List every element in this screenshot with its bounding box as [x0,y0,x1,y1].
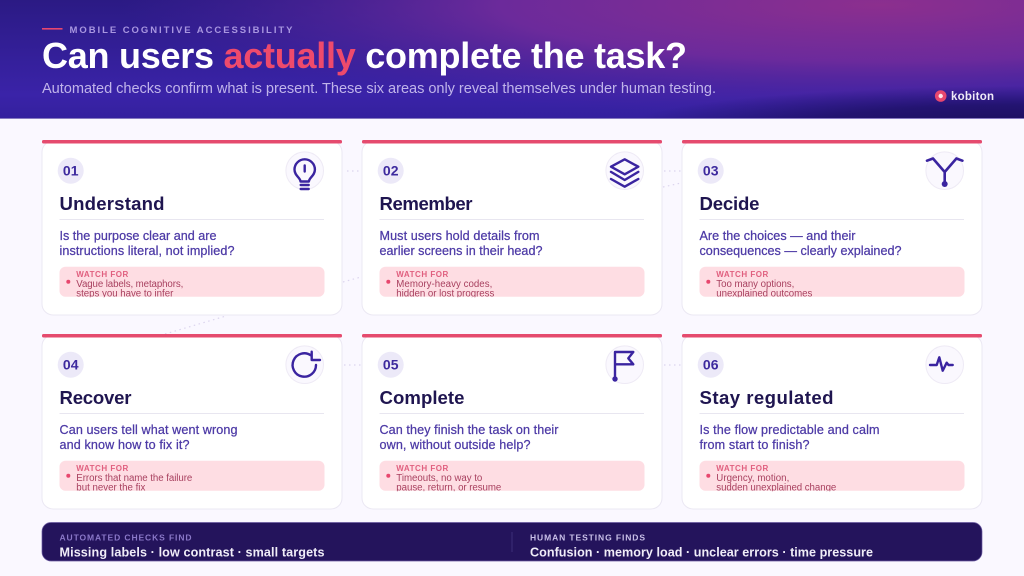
logo: kobiton: kobiton [951,91,994,103]
number badge 02 [378,158,404,184]
number badge 03: 03 [703,163,719,179]
watch for callout: pause, return, or resume [396,482,501,493]
panel: 02 Remember [362,140,662,315]
icon: layers [606,152,644,190]
number badge 01: 01 [63,163,79,179]
question: Are the choices — and their [700,229,856,243]
question: Is the purpose clear and are [60,229,216,243]
question: and know how to fix it? [60,438,190,452]
watch for callout [60,267,324,299]
header band [0,0,1024,119]
watch for callout: WATCH FOR [716,464,769,473]
watch for callout: Vague labels, metaphors, [76,279,183,290]
dotted connectors [165,171,681,365]
question [60,423,238,452]
question: Must users hold details from [380,229,540,243]
panel: 05 Complete [362,334,662,509]
watch for callout: WATCH FOR [76,464,129,473]
question: consequences — clearly explained? [700,244,902,258]
automated checks find: AUTOMATED CHECKS FIND [60,533,192,543]
question: own, without outside help? [380,438,530,452]
question [700,229,902,258]
watch for callout: WATCH FOR [76,270,129,279]
automated checks find: Missing labels · low contrast · small targets [60,546,324,560]
question: earlier screens in their head? [380,244,542,258]
panel: 06 Stay regulated [682,334,982,509]
number badge 06: 06 [703,357,719,373]
question: Can users tell what went wrong [60,423,238,437]
title: Can users actually complete the task? [42,35,687,76]
eyebrow: MOBILE COGNITIVE ACCESSIBILITY [70,25,293,36]
question: instructions literal, not implied? [60,244,234,258]
watch for callout [700,267,964,299]
watch for callout: Errors that name the failure [76,473,192,484]
number badge 02: 02 [383,163,399,179]
icon: light bulb [286,152,324,190]
number badge 04 [58,352,84,378]
watch for callout [700,461,964,493]
question [380,229,542,258]
automated checks find [60,533,324,560]
number badge 01 [58,158,84,184]
icon: pulse line [926,346,964,384]
human testing finds [530,533,873,560]
heading: Recover [60,387,132,408]
watch for callout: WATCH FOR [396,270,449,279]
panel: 04 Recover [42,334,342,509]
human testing finds: Confusion · memory load · unclear errors · time pressure [530,546,873,560]
question: from start to finish? [700,438,810,452]
watch for callout: sudden unexplained change [716,482,836,493]
watch for callout: but never the fix [76,482,145,493]
panel: 01 Understand [42,140,342,315]
comparison bar [42,522,982,561]
human testing finds: HUMAN TESTING FINDS [530,533,645,543]
heading: Stay regulated [700,387,834,408]
number badge 03 [698,158,724,184]
watch for callout: WATCH FOR [716,270,769,279]
subtitle: Automated checks confirm what is present. These six areas only reveal themselves under human testing. [42,81,716,97]
watch for callout: Memory-heavy codes, [396,279,492,290]
heading: Remember [380,193,472,214]
question [700,423,880,452]
number badge 05 [378,352,404,378]
question [380,423,558,452]
watch for callout: WATCH FOR [396,464,449,473]
watch for callout: Timeouts, no way to [396,473,482,484]
watch for callout [380,267,644,299]
heading: Understand [60,193,164,214]
watch for callout: Urgency, motion, [716,473,789,484]
heading: Decide [700,193,760,214]
watch for callout [60,461,324,493]
icon: flag [606,346,644,384]
question: Is the flow predictable and calm [700,423,880,437]
watch for callout: unexplained outcomes [716,288,812,299]
watch for callout: hidden or lost progress [396,288,494,299]
panel: 03 Decide [682,140,982,315]
watch for callout: steps you have to infer [76,288,174,299]
question [60,229,234,258]
icon: retry arrow [286,346,324,384]
watch for callout: Too many options, [716,279,794,290]
number badge 05: 05 [383,357,399,373]
logo: kobiton [935,90,994,103]
watch for callout [380,461,644,493]
number badge 06 [698,352,724,378]
icon: decision fork [926,152,964,190]
number badge 04: 04 [63,357,79,373]
heading: Complete [380,387,464,408]
question: Can they finish the task on their [380,423,558,437]
